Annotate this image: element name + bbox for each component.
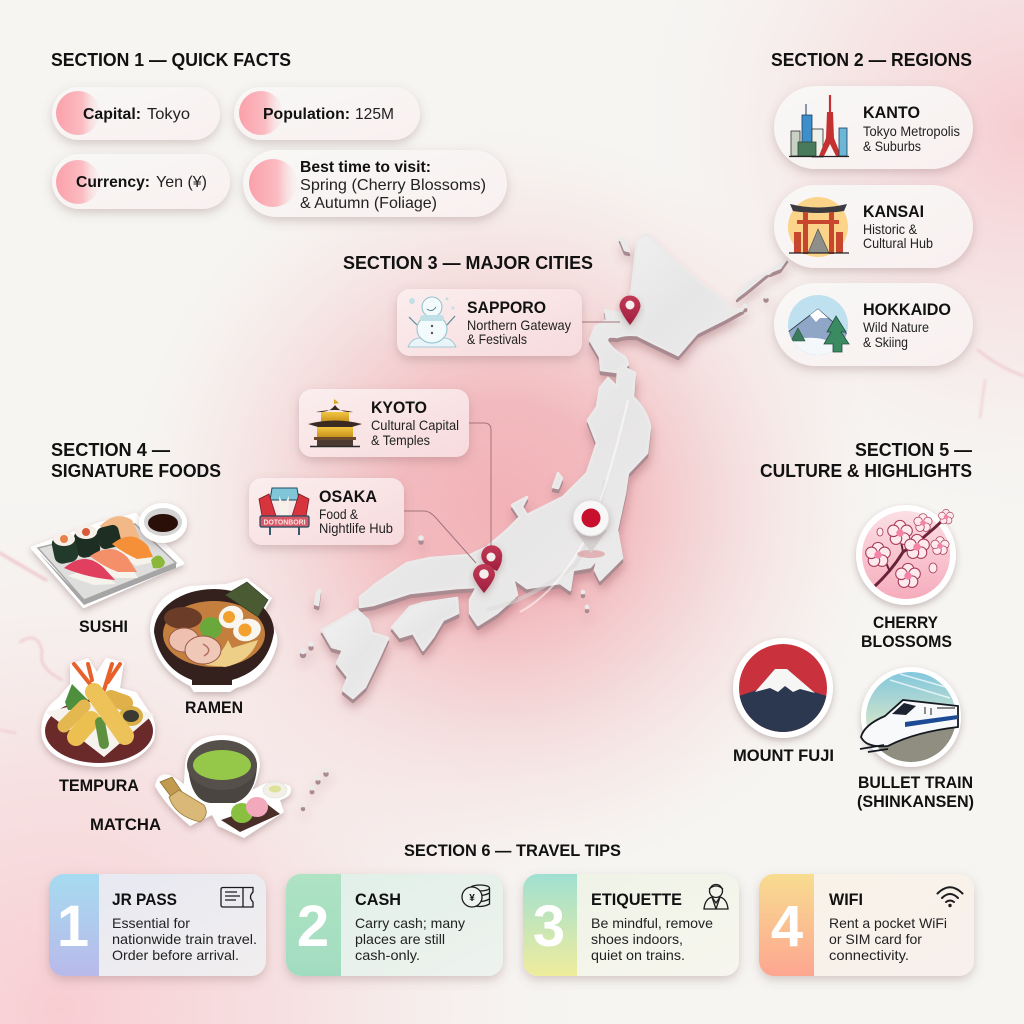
tip 4: wifi: Rent a pocket WiFi <box>829 915 947 931</box>
city: Sapporo: & Festivals <box>467 331 527 347</box>
fact: best time: & Autumn (Foliage) <box>300 195 437 212</box>
heading: signature foods: SIGNATURE FOODS <box>51 461 221 481</box>
fact: currency: Currency: <box>76 174 150 191</box>
icon: torii gate <box>788 197 849 257</box>
region: Kanto <box>774 86 973 169</box>
fact: population: Population: <box>263 106 350 123</box>
city: Kyoto: & Temples <box>371 432 430 448</box>
highlight: bullet train <box>860 667 961 770</box>
tip 1: JR Pass: Essential for <box>112 915 190 931</box>
tip 3: etiquette: Be mindful, remove <box>591 915 713 931</box>
city: Osaka: Food & <box>319 506 359 522</box>
panel: major cities <box>249 289 582 545</box>
panel: signature foods <box>33 503 291 838</box>
icon: coins: ¥ <box>469 893 475 904</box>
city: Sapporo: Northern Gateway <box>467 317 571 333</box>
tip 4: wifi: 4 <box>771 894 803 959</box>
food label: ramen: RAMEN <box>185 698 243 717</box>
icon: ticket <box>221 888 253 907</box>
heading: section 4: SECTION 4 — <box>51 440 170 460</box>
highlight: cherry blossoms <box>856 505 956 605</box>
city: Kyoto <box>299 389 469 457</box>
city: Osaka <box>249 478 404 545</box>
food label: sushi: SUSHI <box>79 617 128 636</box>
city: Sapporo <box>397 289 582 356</box>
highlight label: bullet train: (SHINKANSEN) <box>857 792 974 811</box>
highlight label: Mount Fuji: MOUNT FUJI <box>733 746 834 765</box>
highlight label: cherry blossoms: BLOSSOMS <box>861 632 952 651</box>
fact: population <box>234 87 420 140</box>
region: Kansai: Cultural Hub <box>863 235 933 251</box>
fact: best time: Best time to visit: <box>300 159 431 176</box>
tip 1: JR Pass: Order before arrival. <box>112 947 239 963</box>
heading: section 2: SECTION 2 — REGIONS <box>771 50 972 70</box>
tip 2: cash <box>286 874 503 976</box>
tip 2: cash: CASH <box>355 890 401 909</box>
connector: Osaka <box>404 511 476 563</box>
fact: capital <box>52 87 220 140</box>
panel: travel tips <box>49 874 974 976</box>
panel: regions <box>774 86 973 366</box>
tip 4: wifi <box>759 874 974 976</box>
tip 2: cash: places are still <box>355 931 445 947</box>
region: Hokkaido <box>774 283 973 366</box>
tip 1: JR Pass: JR PASS <box>112 890 177 909</box>
icon: golden pavilion <box>308 399 362 446</box>
city: Osaka: Nightlife Hub <box>319 520 393 536</box>
region: Kanto: KANTO <box>863 103 920 122</box>
food: tempura <box>41 658 155 767</box>
heading: culture and highlights: CULTURE & HIGHLIGHTS <box>760 461 972 481</box>
tip 3: etiquette: shoes indoors, <box>591 931 683 947</box>
fact: capital: Capital: <box>83 106 141 123</box>
icon: Tokyo skyline <box>789 95 849 157</box>
tip 4: wifi: WIFI <box>829 890 863 909</box>
fact: currency <box>52 154 230 209</box>
heading: section 5: SECTION 5 — <box>855 440 972 460</box>
pin: Kyoto <box>481 545 502 571</box>
region: Kansai: KANSAI <box>863 202 924 221</box>
region: Hokkaido: Wild Nature <box>863 319 929 335</box>
region: Kansai <box>774 185 973 268</box>
food label: matcha: MATCHA <box>90 815 161 834</box>
food: matcha set <box>155 735 291 838</box>
tip 1: JR Pass: 1 <box>57 894 89 959</box>
Shikoku <box>392 598 458 650</box>
region: Hokkaido: HOKKAIDO <box>863 300 951 319</box>
panel: culture and highlights <box>733 505 974 811</box>
heading: section 3: SECTION 3 — MAJOR CITIES <box>343 253 593 273</box>
tip 4: wifi: connectivity. <box>829 947 909 963</box>
islands <box>737 272 768 297</box>
heading: section 1: SECTION 1 — QUICK FACTS <box>51 50 291 70</box>
food label: tempura: TEMPURA <box>59 776 139 795</box>
highlight label: cherry blossoms: CHERRY <box>873 613 939 632</box>
map of Japan <box>301 235 787 806</box>
city: Sapporo: SAPPORO <box>467 298 546 317</box>
fact: best time <box>243 150 507 217</box>
pin: Sapporo <box>620 296 640 325</box>
highlight: Mount Fuji <box>733 638 833 740</box>
connector: Kyoto <box>469 423 491 550</box>
panel: quick facts <box>52 87 507 217</box>
icon: Dotonbori sign <box>259 488 309 535</box>
region: Kanto: Tokyo Metropolis <box>863 123 960 139</box>
tip 2: cash: Carry cash; many <box>355 915 465 931</box>
pin: Tokyo with Japanese flag <box>573 500 609 558</box>
tip 1: JR Pass: nationwide train travel. <box>112 931 257 947</box>
tip 3: etiquette: quiet on trains. <box>591 947 685 963</box>
region: Kansai: Historic & <box>863 221 918 237</box>
fact: population: 125M <box>355 106 394 123</box>
Honshu <box>360 367 650 625</box>
pin: Osaka <box>473 564 495 593</box>
tip 3: etiquette: 3 <box>533 894 565 959</box>
icon: snowy mountain and pine <box>788 295 850 360</box>
Hokkaido <box>590 235 743 372</box>
highlight label: bullet train <box>857 773 974 811</box>
Kyushu <box>322 610 388 698</box>
city: Kyoto: KYOTO <box>371 398 427 417</box>
city: Kyoto: Cultural Capital <box>371 417 459 433</box>
region: Hokkaido: & Skiing <box>863 334 908 350</box>
icon: Dotonbori sign: DOTONBORI <box>264 518 306 526</box>
city: Osaka: OSAKA <box>319 487 377 506</box>
fact: capital: Tokyo <box>147 106 190 123</box>
food: ramen <box>150 578 277 692</box>
tip 3: etiquette: ETIQUETTE <box>591 890 682 909</box>
highlight label: cherry blossoms <box>861 613 952 651</box>
icon: snowman <box>408 297 456 347</box>
icon: wifi <box>938 887 962 907</box>
food: sushi <box>33 503 187 606</box>
fact: currency: Yen (¥) <box>156 174 207 191</box>
heading: section 6: SECTION 6 — TRAVEL TIPS <box>404 841 621 860</box>
region: Kanto: & Suburbs <box>863 138 921 154</box>
tip 1: JR Pass <box>49 874 266 976</box>
connector: Sapporo <box>582 321 620 323</box>
tip 4: wifi: or SIM card for <box>829 931 922 947</box>
highlight label: bullet train: BULLET TRAIN <box>858 773 973 792</box>
tip 3: etiquette <box>523 874 739 976</box>
icon: coins <box>462 885 490 907</box>
fact: best time: Spring (Cherry Blossoms) <box>300 177 486 194</box>
tip 2: cash: 2 <box>297 894 329 959</box>
tip 2: cash: cash-only. <box>355 947 420 963</box>
icon: bowing person <box>704 884 728 909</box>
